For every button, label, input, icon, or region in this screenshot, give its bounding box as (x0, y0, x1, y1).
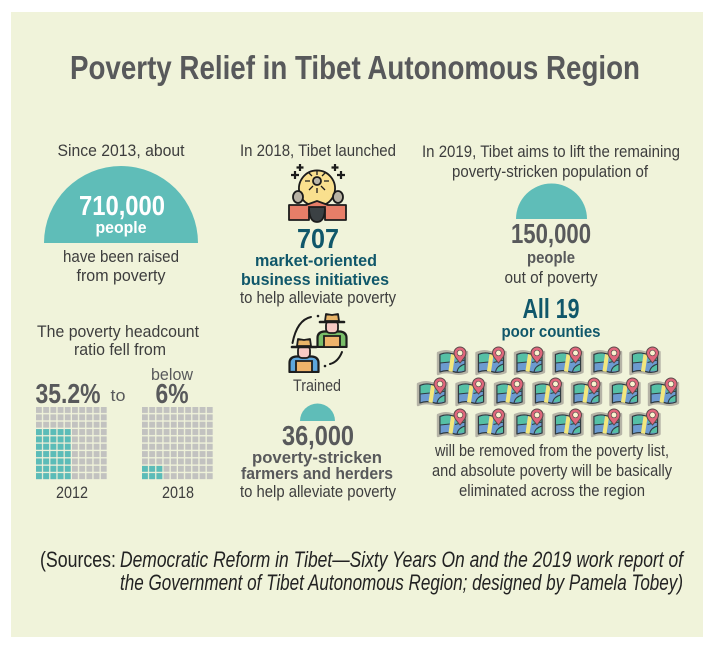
text: raised from poverty: have been raised (63, 248, 179, 266)
icon: light bulb with two people (289, 164, 346, 222)
text: farmers and herders: farmers and herders (241, 465, 393, 483)
text: poverty-stricken: poverty-stricken (252, 449, 382, 467)
panel: poor counties (418, 293, 678, 500)
text: out of poverty: out of poverty (504, 269, 598, 287)
semicircle: 150,000 (516, 184, 587, 219)
label: people: people (527, 249, 575, 267)
label: 2018: 2018 (162, 484, 194, 502)
number: 707: 707 (297, 223, 339, 254)
text: market-oriented: market-oriented (255, 252, 377, 270)
number: 150,000: 150,000 (511, 218, 591, 249)
icon: two farmers (290, 314, 346, 372)
label: 2012: 2012 (56, 484, 88, 502)
label: trained: Trained (293, 377, 341, 395)
panel: headcount ratio (36, 323, 214, 502)
number: 710,000: 710,000 (79, 190, 165, 221)
panel: trained farmers (240, 314, 397, 501)
waffle chart 2018 (142, 407, 214, 480)
text: ratio fell from: ratio fell from (74, 341, 166, 359)
text: removed from list: will be removed from the poverty list, (434, 442, 669, 460)
number: 35.2%: 35.2% (36, 378, 101, 409)
intro text: since 2013: Since 2013, about (58, 142, 185, 160)
label: below: below (151, 366, 193, 384)
text: from poverty: from poverty (76, 267, 166, 285)
source label: (Sources: (40, 547, 116, 572)
text: 2019 aim: In 2019, Tibet aims to lift the remaining (422, 143, 680, 161)
number: 6%: 6% (156, 378, 189, 409)
text: launched: In 2018, Tibet launched (240, 142, 396, 160)
icons: 19 county maps (418, 347, 678, 436)
label: poor counties: poor counties (502, 323, 600, 341)
label: people: people (96, 219, 146, 237)
text: headcount ratio intro: The poverty headcount (37, 323, 199, 341)
sources note (40, 547, 685, 595)
waffle chart 2012 (36, 407, 108, 480)
text: eliminated: eliminated across the region (459, 482, 645, 500)
panel: people raised from poverty (44, 142, 198, 285)
text: remaining population: poverty-stricken population of (452, 163, 648, 181)
number: All 19: All 19 (522, 293, 580, 324)
panel: 2019 target (422, 143, 680, 287)
semicircle: 36,000 (300, 404, 335, 421)
text: help alleviate poverty: to help alleviate poverty (240, 483, 397, 501)
text: business initiatives: business initiatives (241, 271, 389, 289)
number: 36,000: 36,000 (282, 420, 354, 451)
text: help alleviate poverty: to help alleviate poverty (240, 289, 397, 307)
text: absolute poverty: and absolute poverty will be basically (432, 462, 673, 480)
semicircle: 710,000 people (44, 166, 198, 243)
panel: business initiatives (240, 142, 397, 307)
label: to: to (110, 387, 126, 405)
